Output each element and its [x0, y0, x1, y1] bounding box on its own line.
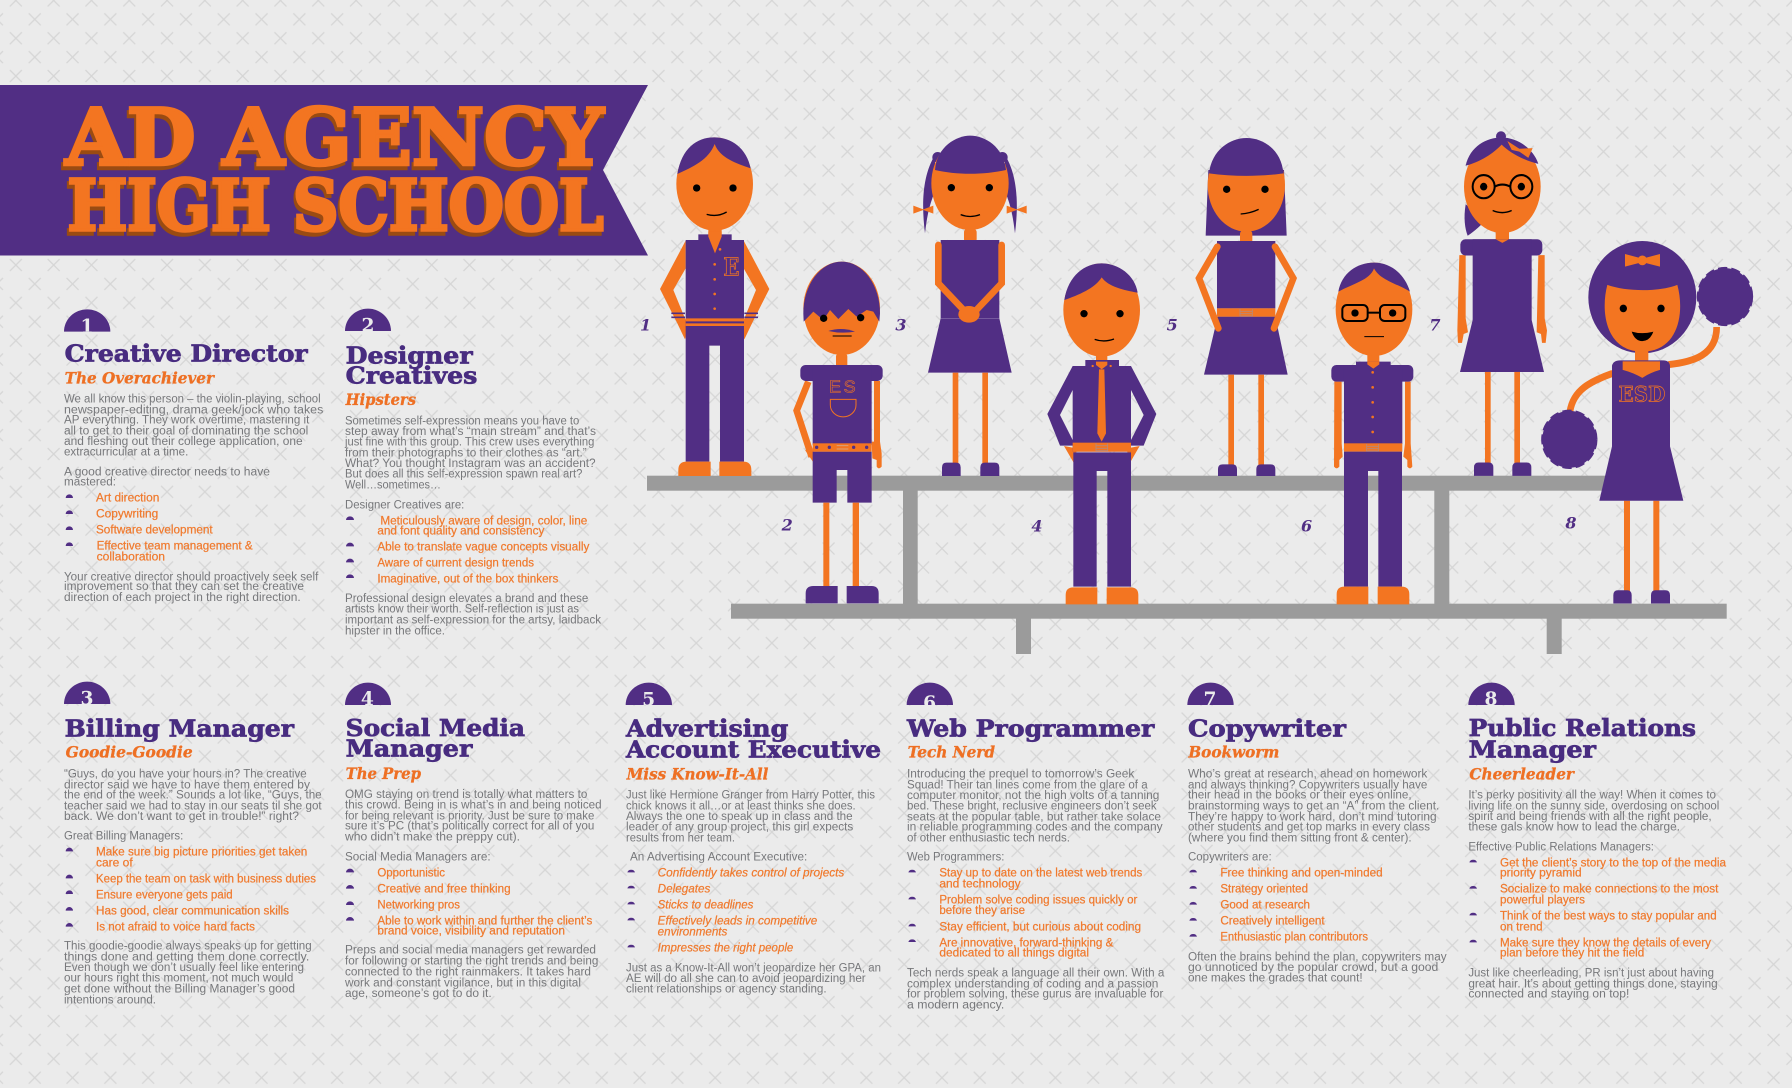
bullet list: Free thinking and open-minded — [1220, 865, 1383, 879]
character number labels: 7 — [1429, 316, 1440, 335]
description: from their photographs to their clothes as “art.” — [345, 445, 587, 459]
closing text: Professional design elevates a brand and these — [345, 591, 589, 605]
bullet list — [346, 514, 589, 586]
description: Sometimes self-expression means you have to — [345, 413, 580, 427]
bullet list — [66, 845, 316, 933]
bullet list: Problem solve coding issues quickly or — [939, 892, 1137, 906]
subheading: The Overachiever — [65, 368, 215, 387]
description: Always the one to speak up in class and the — [626, 809, 853, 823]
bullet list: Confidently takes control of projects — [658, 866, 844, 880]
bullet list: Copywriting — [96, 506, 158, 520]
closing text: Even though we don’t usually feel like entering — [64, 960, 304, 974]
character 3: Billing Manager — [913, 136, 1027, 476]
description: Effective Public Relations Managers: — [1468, 839, 1654, 853]
closing text: go unnoticed by the popular crowd, but a good — [1188, 960, 1438, 974]
description: this crowd. Being in is what’s in and being noticed — [345, 798, 602, 812]
character 5: Advertising Account Executive — [1199, 138, 1293, 476]
heading: Public Relations — [1469, 714, 1696, 742]
description: Copywriters are: — [1188, 850, 1272, 864]
bullet list: Socialize to make connections to the most — [1500, 882, 1719, 896]
character number labels: 4 — [1031, 517, 1042, 536]
bullet list: Ensure everyone gets paid — [96, 887, 233, 901]
closing text — [907, 966, 1165, 1011]
subheading: Miss Know-It-All — [626, 764, 768, 783]
closing text: Just like cheerleading, PR isn’t just about having — [1468, 966, 1714, 980]
characters 1 to 6 — [660, 136, 1413, 604]
bullet list — [1189, 865, 1383, 943]
bullet list: Enthusiastic plan contributors — [1220, 929, 1368, 943]
bullet list: Creative and free thinking — [377, 881, 511, 895]
description: leader of any group project, this girl expects — [626, 819, 853, 833]
panel: 3 Billing Manager — [64, 682, 322, 1006]
number badge 4 — [345, 682, 391, 705]
closing text: important as self-expression for the artsy, laidback — [345, 612, 602, 626]
bleachers — [647, 476, 1727, 654]
description: “Guys, do you have your hours in? The creative — [64, 767, 307, 781]
bullet list: Effectively leads in competitive — [658, 914, 818, 928]
number badge 2: 2 — [362, 315, 374, 337]
closing text: improvement so that they can set the creative — [64, 579, 304, 593]
character number labels: 8 — [1565, 514, 1576, 533]
heading: Advertising — [625, 715, 788, 743]
subheading: Tech Nerd — [908, 743, 995, 762]
description: living life on the sunny side, overdosing on school — [1468, 798, 1719, 812]
description: brainstorming ways to get an “A” from the client. — [1188, 798, 1439, 812]
character 2: Designer Creative: ES — [829, 377, 856, 397]
description: in reliable programming codes and the company — [907, 820, 1163, 834]
description: other students and get top marks in every class — [1188, 820, 1430, 834]
closing text: client relationships or agency standing. — [626, 982, 827, 996]
panel: 7 Copywriter — [1187, 683, 1447, 984]
description — [1188, 767, 1439, 864]
heading: Social Media — [346, 714, 525, 742]
bullet list: Sticks to deadlines — [658, 898, 753, 912]
description — [907, 767, 1163, 864]
bullet list: Make sure big picture priorities get taken — [96, 845, 307, 859]
bullet list: Make sure they know the details of every — [1500, 935, 1711, 949]
description: Social Media Managers are: — [345, 849, 491, 863]
character 8: Public Relations Manager — [1542, 241, 1752, 604]
bullet list: Keep the team on task with business duties — [96, 871, 316, 885]
closing text: for problem solving, these gurus are invaluable for — [907, 987, 1163, 1001]
description: Web Programmers: — [907, 850, 1004, 864]
closing text: Preps and social media managers get rewarded — [345, 943, 596, 957]
description: Designer Creatives are: — [345, 497, 464, 511]
bullet list: Opportunistic — [377, 865, 445, 879]
description: bed. These bright, reclusive engineers don’t seek — [907, 798, 1158, 812]
subheading: Cheerleader — [1469, 764, 1575, 783]
bullet list: Think of the best ways to stay popular and — [1500, 908, 1717, 922]
number badge 4: 4 — [361, 688, 374, 710]
number badge 7: 7 — [1204, 688, 1216, 710]
bullet list: Delegates — [658, 882, 710, 896]
description: It’s perky positivity all the way! When it comes to — [1468, 787, 1716, 801]
panel: 5 Advertising Account Executive — [625, 683, 881, 996]
description: newspaper-editing, drama geek/jock who takes — [64, 402, 323, 416]
closing text: hipster in the office. — [345, 623, 445, 637]
description: step away from what’s “main stream” and that’s — [345, 424, 596, 438]
bullet list: Able to work within and further the client’s — [377, 913, 592, 927]
description: and fleshing out their college application, one — [64, 434, 303, 448]
subheading: The Prep — [346, 764, 421, 783]
character number labels: 1 — [640, 316, 651, 335]
description: We all know this person – the violin-playing, school — [64, 392, 321, 406]
bullet list: environments — [658, 924, 727, 938]
subheading: Bookworm — [1187, 743, 1279, 762]
character number labels — [640, 316, 1576, 536]
description: sure it’s PC (that’s politically correct for all of you — [345, 819, 594, 833]
bullet list: before they arise — [939, 903, 1025, 917]
bullet list: dedicated to all things digital — [939, 946, 1089, 960]
closing text — [1468, 966, 1718, 1001]
bullet list: Is not afraid to voice hard facts — [96, 919, 255, 933]
heading: Billing Manager — [65, 715, 295, 743]
description: Just like Hermione Granger from Harry Potter, this — [626, 787, 875, 801]
subheading: Goodie-Goodie — [66, 743, 193, 762]
bullet list: Get the client’s story to the top of the media — [1500, 855, 1726, 869]
description — [344, 413, 596, 511]
character 4: Social Media Manager — [1047, 263, 1156, 604]
closing text — [1188, 949, 1447, 984]
bullet list — [346, 865, 592, 937]
closing text — [64, 569, 319, 604]
description: who didn’t make the preppy cut). — [344, 829, 520, 843]
closing text: artists know their worth. Self-reflection is just as — [345, 601, 579, 615]
bullet list — [627, 866, 844, 955]
panel: 2 Designer Creatives — [344, 309, 602, 637]
number badge 1 — [64, 309, 110, 332]
character 7: Copywriter — [1457, 131, 1547, 476]
description: these gals know how to lead the charge. — [1468, 820, 1680, 834]
description: results from her team. — [626, 830, 735, 844]
closing text: Just as a Know-It-All won’t jeopardize her GPA, an — [626, 960, 881, 974]
heading — [1469, 714, 1696, 763]
number badge 8: 8 — [1485, 688, 1497, 710]
description: director said we have to have them entered by — [64, 777, 310, 791]
bullet list: Effective team management & — [97, 538, 253, 552]
description: They’re happy to work hard, don’t mind tutoring — [1188, 809, 1437, 823]
description: mastered: — [64, 474, 116, 488]
description: AP everything. They work overtime, mastering it — [64, 413, 310, 427]
closing text: complex understanding of coding and a passion — [907, 976, 1158, 990]
character number labels: 6 — [1301, 517, 1312, 536]
closing text: age, someone’s got to do it. — [345, 986, 492, 1000]
title: Ad Agency High School: HIGH SCHOOL — [66, 168, 602, 251]
character 1: Creative Director: E — [723, 252, 739, 281]
heading: Creatives — [346, 361, 477, 389]
title: Ad Agency High School: HIGH SCHOOL — [68, 164, 604, 247]
heading: Copywriter — [1188, 715, 1347, 743]
panel: 6 Web Programmer — [906, 683, 1165, 1011]
bullet list: Are innovative, forward-thinking & — [939, 935, 1113, 949]
bullet list: and technology — [939, 876, 1021, 890]
description — [64, 767, 322, 842]
bullet list: Stay up to date on the latest web trends — [939, 865, 1142, 879]
bullet list: Meticulously aware of design, color, line — [380, 514, 588, 528]
closing text: our hours right this moment, not much would — [64, 970, 293, 984]
title: Ad Agency High School: AD AGENCY — [62, 96, 603, 188]
description: all to get to their goal of dominating the school — [64, 424, 308, 438]
heading: Manager — [346, 735, 473, 763]
bullet list: Strategy oriented — [1220, 881, 1308, 895]
description: A good creative director needs to have — [64, 464, 270, 478]
closing text — [626, 960, 881, 996]
bullet list: Art direction — [96, 490, 159, 504]
closing text: one makes the grades that count! — [1188, 970, 1363, 984]
bullet list — [66, 490, 253, 563]
character 8: Public Relations Manager: ESD — [1619, 382, 1665, 408]
description: computer monitor, not the high volts of a tanning — [907, 788, 1159, 802]
description — [1468, 787, 1719, 853]
description — [344, 787, 602, 863]
title: Ad Agency High School: AD AGENCY — [64, 92, 605, 184]
bullet list: Networking pros — [377, 897, 460, 911]
number badge 5 — [626, 682, 672, 705]
closing text: for following or starting the right trends and being — [345, 954, 598, 968]
title: Ad Agency High School — [62, 92, 605, 251]
closing text: great hair. It’s about getting things done, staying — [1468, 976, 1718, 990]
heading — [625, 715, 881, 763]
character number labels: 3 — [895, 316, 906, 335]
heading: Web Programmer — [906, 715, 1155, 743]
bullet list — [1469, 855, 1726, 960]
number badge 6: 6 — [923, 692, 936, 714]
closing text: Your creative director should proactively seek self — [64, 569, 319, 583]
closing text: a modern agency. — [907, 997, 1004, 1011]
description: But does all this self-expression spawn real art? — [345, 467, 583, 481]
panel: 4 Social Media Manager — [344, 683, 602, 1000]
heading: Creative Director — [65, 340, 308, 368]
closing text — [64, 939, 312, 1006]
bullet list: Impresses the right people — [658, 941, 794, 955]
number badge 3 — [64, 682, 110, 704]
bullet list: Software development — [96, 522, 213, 536]
description: seats at the popular table, but rather take solace — [907, 809, 1161, 823]
bullet list: Aware of current design trends — [377, 556, 534, 570]
character number labels: 5 — [1167, 316, 1178, 335]
subheading: Hipsters — [345, 390, 416, 409]
bullet list: Stay efficient, but curious about coding — [939, 919, 1141, 933]
bullet list: on trend — [1500, 919, 1543, 933]
closing text: Tech nerds speak a language all their own. With a — [907, 966, 1165, 980]
character 2: Designer Creative — [797, 262, 883, 603]
number badge 8 — [1468, 682, 1515, 705]
description: for being relevant is priority. Just be sure to make — [345, 808, 595, 822]
description: back. We don’t want to get in trouble!” right? — [64, 809, 299, 823]
number badge 5: 5 — [642, 689, 655, 711]
closing text: connected and staying on top! — [1468, 987, 1629, 1001]
closing text: Often the brains behind the plan, copywriters may — [1188, 949, 1447, 963]
panel: 8 Public Relations Manager — [1468, 683, 1726, 1001]
heading: Designer — [346, 341, 473, 369]
character number labels: 2 — [781, 516, 793, 535]
closing text — [345, 591, 602, 637]
closing text: things done and getting them done correctly. — [64, 950, 309, 964]
heading: Manager — [1469, 735, 1597, 763]
description: their head in the books or their eyes online, — [1188, 788, 1412, 802]
description — [626, 787, 875, 864]
bullet list: collaboration — [97, 549, 165, 563]
description: (where you find them sitting front & center). — [1188, 830, 1412, 844]
title banner — [0, 85, 648, 256]
closing text: direction of each project in the right direction. — [64, 590, 301, 604]
bullet list: Has good, clear communication skills — [96, 903, 289, 917]
heading — [346, 714, 525, 763]
description: chick knows it all…or at least thinks she does. — [626, 798, 856, 812]
description: extracurricular at a time. — [64, 445, 188, 459]
description: and always thinking? Copywriters usually have — [1188, 777, 1428, 791]
closing text: get done without the Billing Manager’s good — [64, 981, 295, 995]
bullet list: Good at research — [1220, 897, 1310, 911]
number badge 1: 1 — [81, 315, 93, 337]
description — [64, 392, 323, 488]
closing text: intentions around. — [64, 992, 156, 1006]
heading — [346, 341, 477, 389]
character 6: Web Programmer — [1331, 263, 1413, 604]
bullet list: Imaginative, out of the box thinkers — [377, 572, 558, 586]
description: Great Billing Managers: — [64, 828, 183, 842]
description: Squad! Their tan lines come from the glare of a — [907, 777, 1148, 791]
bullet list: brand voice, visibility and reputation — [377, 923, 565, 937]
number badge 2 — [345, 308, 391, 331]
heading: Account Executive — [625, 735, 881, 763]
character 1: Creative Director — [660, 137, 769, 476]
bullet list: and font quality and consistency — [377, 523, 544, 537]
bullet list: plan before they hit the field — [1500, 946, 1644, 960]
number badge 6 — [906, 682, 953, 705]
panel: 1 Creative Director — [64, 309, 323, 604]
description: of other enthusiastic tech nerds. — [907, 830, 1070, 844]
description: just fine with this group. This crew uses everything — [344, 435, 594, 449]
bullet list: priority pyramid — [1500, 865, 1582, 879]
bullet list: care of — [96, 855, 133, 869]
description: OMG staying on trend is totally what matters to — [345, 787, 588, 801]
description: Who’s great at research, ahead on homework — [1188, 767, 1428, 781]
closing text: This goodie-goodie always speaks up for getting — [64, 939, 312, 953]
bullet list — [908, 865, 1142, 960]
description: teacher said we had to stay in our seats til she got — [64, 798, 322, 812]
description: spirit and being friends with all the right people, — [1468, 809, 1712, 823]
bullet list: powerful players — [1500, 892, 1585, 906]
closing text: connected to the right rainmakers. It takes hard — [345, 964, 591, 978]
closing text: AE will do all she can to avoid jeopardizing her — [626, 971, 866, 985]
description: Introducing the prequel to tomorrow’s Geek — [907, 767, 1135, 781]
closing text: work and constant vigilance, but in this digital — [344, 975, 581, 989]
description: An Advertising Account Executive: — [630, 850, 807, 864]
description: the end of the week.” Sounds a lot like, “Guys, the — [64, 788, 322, 802]
bullet list: Able to translate vague concepts visually — [377, 540, 589, 554]
characters 7 and 8 — [1457, 131, 1752, 604]
number badge 3: 3 — [81, 688, 93, 710]
closing text — [344, 943, 598, 1000]
number badge 7 — [1187, 682, 1234, 705]
description: What? You thought Instagram was an accident? — [345, 456, 596, 470]
bullet list: Creatively intelligent — [1220, 913, 1325, 927]
description: Well…sometimes… — [345, 477, 441, 491]
